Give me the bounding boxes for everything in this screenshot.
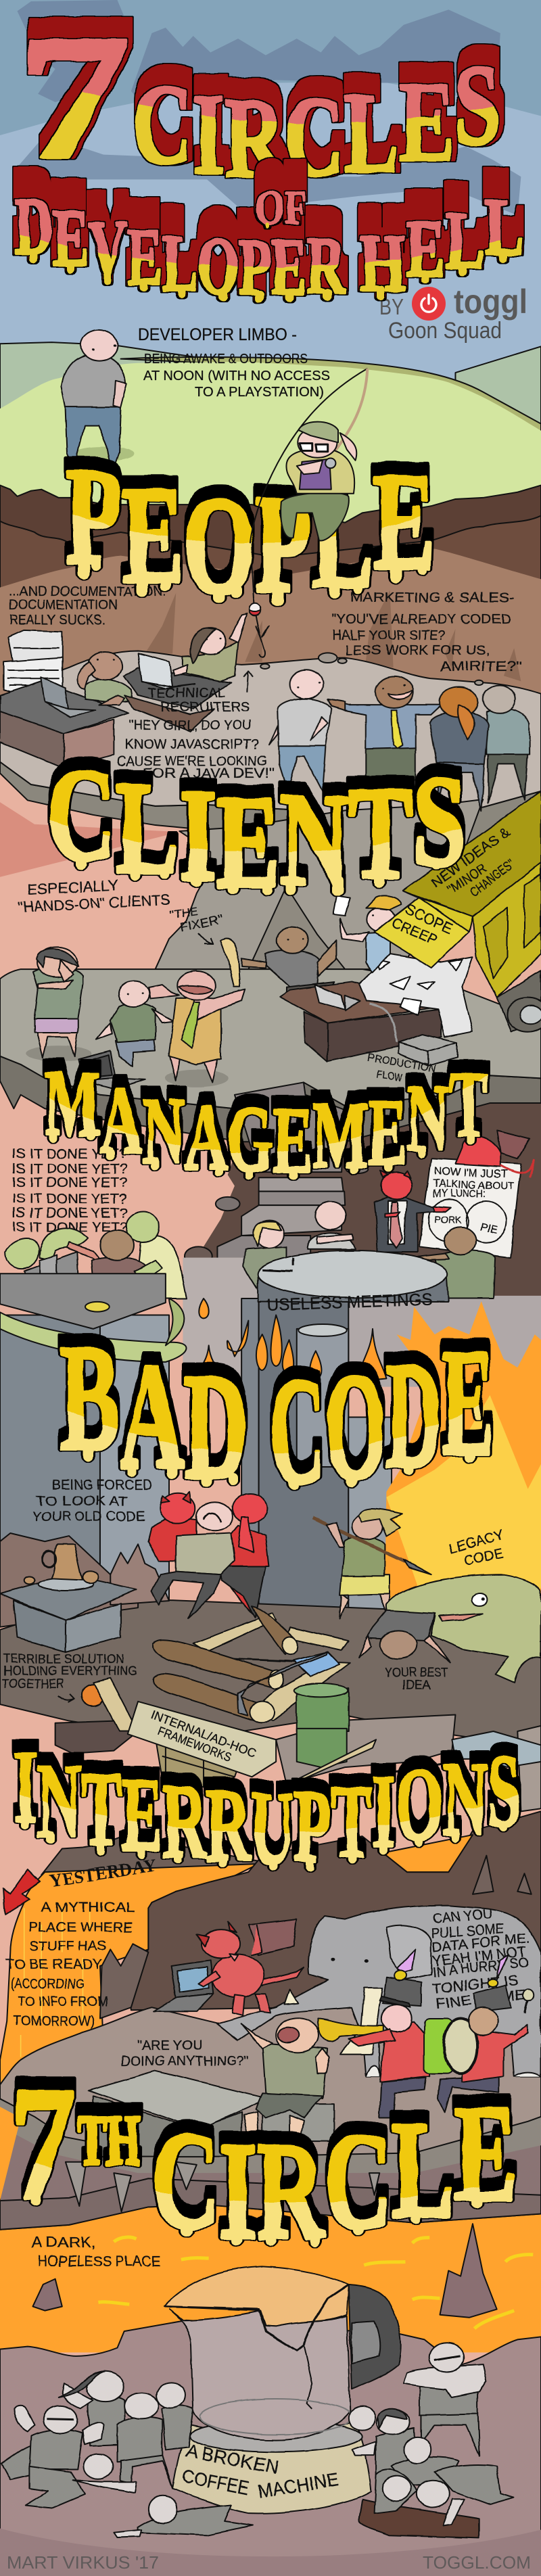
text block: now I'm just talking about my lunch: PORK xyxy=(434,1215,461,1226)
panel: internal framework crate xyxy=(128,1702,541,1789)
title: 7th Circle: 7 xyxy=(10,2053,76,2233)
figure: brown man resting on table xyxy=(410,1227,495,1298)
text block: the fixer: "THE xyxy=(169,906,198,921)
figure: woman covering face xyxy=(26,947,91,1061)
title: 7th Circle xyxy=(10,2053,517,2268)
fishing float and hook xyxy=(249,543,269,657)
text block: now I'm just talking about my lunch: MY LUNCH: xyxy=(433,1188,486,1200)
text block: yesterday: (ACCORDING xyxy=(10,1977,85,1992)
text block: elephant request: FINE BY ME xyxy=(435,1987,526,2012)
panel: interruptions scene xyxy=(3,1854,541,2157)
text block: is it done yet: IS IT DONE YET? xyxy=(12,1206,127,1221)
panel: soil layers and office floor xyxy=(0,486,541,852)
text block: developer limbo: TO A PLAYSTATION) xyxy=(195,385,324,400)
text block: developer limbo: AT NOON (WITH NO ACCESS xyxy=(143,369,330,383)
text block: marketing and sales: LESS WORK FOR US, xyxy=(345,643,490,658)
icon: basketball xyxy=(82,1684,104,1706)
panel: interruptions cavern background and lava xyxy=(0,1715,541,2352)
panel: sky and limbo hills xyxy=(0,0,541,552)
text block: elephant request xyxy=(431,1906,531,2012)
truck captions xyxy=(367,824,518,1084)
text block: is it done yet: IS IT DONE YET? xyxy=(12,1220,127,1235)
title: of: OF xyxy=(256,181,307,235)
text block: marketing and sales xyxy=(331,590,522,674)
text block: terrible solution xyxy=(2,1652,138,1691)
figure: marketer three with orange hair xyxy=(429,687,488,811)
meeting table xyxy=(258,1250,448,1302)
icon: toggl logo with byline: Goon Squad xyxy=(388,318,502,344)
text block: a dark hopeless place: A DARK, xyxy=(31,2234,95,2251)
text block: now I'm just talking about my lunch: PIE xyxy=(479,1221,498,1236)
figure: elephant in the room xyxy=(217,1905,541,2076)
text block: hands-on clients: ESPECIALLY xyxy=(27,876,119,898)
text block: old code: YOUR OLD CODE xyxy=(32,1509,145,1524)
title: 7th Circle: CIRCLE xyxy=(151,2077,517,2268)
truck captions: FLOW xyxy=(375,1069,403,1084)
figure: marketer one xyxy=(269,670,331,792)
title: Developer Hell xyxy=(15,181,524,312)
title: People: PEOPLE xyxy=(66,440,435,622)
text block: terrible solution: HOLDING EVERYTHING xyxy=(3,1664,138,1679)
text block: a dark hopeless place: HOPELESS PLACE xyxy=(38,2253,160,2270)
figure: zombie lying in front xyxy=(114,2496,252,2537)
title: Interruptions: INTERRUPTIONS xyxy=(14,1728,521,1886)
text block: elephant request: TONIGHT IS xyxy=(431,1973,519,1997)
panel: lizard desk and duck xyxy=(0,1273,187,1362)
figure: broken laptop xyxy=(78,1050,145,1090)
text block: old code: BEING FORCED xyxy=(52,1478,152,1493)
text block: a broken coffee machine: MACHINE xyxy=(256,2468,339,2502)
icon: toggl logo with byline xyxy=(379,283,527,344)
text block: is it done yet: IS IT DONE YET? xyxy=(12,1175,127,1190)
coffee puddle xyxy=(359,2500,479,2538)
table xyxy=(88,2071,267,2157)
panel: limbo captions and logo xyxy=(138,283,527,400)
text: internal ad-hoc frameworks sign: FRAMEWORKS xyxy=(156,1724,233,1764)
text block: marketing and sales: MARKETING & SALES- xyxy=(350,590,514,605)
text block: marketing and sales: HALF YOUR SITE? xyxy=(333,628,445,643)
text block: elephant request: DATA FOR ME. xyxy=(431,1930,531,1956)
text block: now I'm just talking about my lunch: NOW I'M JUST xyxy=(434,1166,508,1180)
text block: marketing and sales: "YOU'VE ALREADY CODED xyxy=(331,612,511,627)
figure: trumpet player xyxy=(317,1949,429,2117)
figure: overconfident client at desk xyxy=(241,927,336,996)
figure: right crowd of zombies xyxy=(349,2343,514,2526)
text block: elephant request: IN A HURRY SO xyxy=(431,1954,530,1980)
technical recruiters caption xyxy=(117,686,275,781)
text block: elephant request: CAN YOU xyxy=(431,1906,493,1927)
figure: lizard managers harassing developer xyxy=(0,1211,187,1298)
text block: your best idea: YOUR BEST xyxy=(385,1666,448,1680)
text block: yesterday: PLACE WHERE xyxy=(29,1920,133,1935)
text: credits xyxy=(7,2552,531,2573)
truck captions: CREEP xyxy=(389,914,440,949)
figure: interrupted developer xyxy=(241,2018,335,2141)
text block: a broken coffee machine: A BROKEN xyxy=(184,2439,281,2479)
text block: a broken coffee machine xyxy=(181,2439,339,2502)
text block: your best idea xyxy=(385,1666,448,1693)
text: credits: TOGGL.COM xyxy=(423,2552,531,2573)
text: internal ad-hoc frameworks sign: INTERNAL/AD-HOC xyxy=(149,1708,258,1760)
figure: developer in limbo xyxy=(62,329,134,472)
text block: yesterday: TO INFO FROM xyxy=(18,1994,108,2009)
panel: bad code cavern background xyxy=(0,1258,541,1748)
text block: documentation: DOCUMENTATION xyxy=(9,598,118,613)
text block: hands-on clients xyxy=(18,876,170,916)
title: 7th Circle: TH xyxy=(78,2101,140,2180)
desk and production server xyxy=(279,981,457,1066)
text block: is it done yet: IS IT DONE YET? xyxy=(12,1162,127,1177)
text block: yesterday: STUFF HAS xyxy=(29,1939,107,1954)
truck captions: PRODUCTION xyxy=(367,1052,437,1075)
text: useless meetings: USELESS MEETINGS xyxy=(266,1290,433,1315)
panel: seventh circle lava and ground xyxy=(0,2224,541,2576)
paper stacks xyxy=(3,630,62,699)
panel: management scene xyxy=(0,1131,535,1302)
figure: devils restraining developer xyxy=(148,1492,269,1619)
technical recruiters caption: "HEY GIRL, DO YOU xyxy=(129,718,252,733)
technical recruiters caption: FOR A JAVA DEV!" xyxy=(143,766,275,781)
title: Bad Code: CODE xyxy=(269,1317,494,1515)
panel: bad code scene xyxy=(0,1478,541,1731)
text block: hands-on clients: "HANDS-ON" CLIENTS xyxy=(18,891,170,916)
figure: drummer xyxy=(425,1955,534,2112)
figure: left crowd of zombies xyxy=(1,2371,193,2508)
technical recruiters caption: CAUSE WE'RE LOOKING xyxy=(117,754,267,769)
truck captions: NEW IDEAS & xyxy=(428,824,513,891)
text block: are you doing anything: "ARE YOU xyxy=(137,2038,202,2053)
pedestal with pot xyxy=(0,1544,137,1652)
text block: elephant request: PULL SOME xyxy=(431,1921,504,1942)
figure: marketer four xyxy=(484,686,530,803)
paper pile xyxy=(359,954,473,1037)
panel: clients cavern background xyxy=(0,799,541,1307)
text block: yesterday: TO BE READY xyxy=(5,1957,102,1972)
arrow: yesterday xyxy=(3,1869,40,1915)
text block: the fixer xyxy=(169,906,225,935)
text block: terrible solution: TOGETHER xyxy=(2,1677,64,1691)
text block: developer limbo: DEVELOPER LIMBO - xyxy=(138,325,297,344)
panel: clients scene xyxy=(18,791,541,1090)
coffee machine xyxy=(164,2266,401,2513)
text block: terrible solution: TERRIBLE SOLUTION xyxy=(3,1652,124,1666)
technical recruiters caption: RECRUITERS xyxy=(160,700,250,715)
figure: devil boss in suit xyxy=(375,1171,450,1252)
text block: a dark hopeless place xyxy=(31,2234,160,2270)
text: credits: MART VIRKUS '17 xyxy=(7,2552,159,2573)
icon: toggl logo with byline: BY xyxy=(379,294,404,319)
figure: red devil with laptop xyxy=(154,1919,304,2015)
wood pile and tools xyxy=(93,1606,350,1731)
panel: seventh circle scene xyxy=(1,2234,514,2538)
text block: is it done yet xyxy=(12,1147,127,1235)
title: Developer Hell: HELL xyxy=(360,182,524,308)
figure: fisherman above people title xyxy=(250,369,367,543)
text block: marketing and sales: AMIRITE?" xyxy=(440,659,522,674)
text block: is it done yet: IS IT DONE YET? xyxy=(12,1192,127,1207)
text block: your best idea: IDEA xyxy=(402,1679,431,1693)
text block: developer limbo xyxy=(138,325,330,400)
text block: legacy code: CODE xyxy=(463,1546,504,1569)
text block: now I'm just talking about my lunch: TALKING ABOUT xyxy=(433,1178,515,1192)
truck captions: "MINOR xyxy=(444,861,490,897)
icon: toggl logo with byline: toggl xyxy=(454,283,527,321)
text block: old code xyxy=(32,1478,152,1524)
panel: people scene xyxy=(0,543,530,811)
text block: yesterday xyxy=(5,1854,158,2029)
text block: yesterday: A MYTHICAL xyxy=(41,1900,135,1915)
figure: caveman fixer with club xyxy=(148,939,245,1087)
text block: a broken coffee machine: COFFEE xyxy=(181,2465,251,2499)
figure: legacy code monster xyxy=(359,1574,541,1682)
figure: bored coworker xyxy=(307,1202,356,1249)
text block: old code: TO LOOK AT xyxy=(37,1494,128,1509)
title: 7 Circles: 7 xyxy=(17,0,132,197)
title: 7 Circles: CIRCLES xyxy=(133,41,500,202)
figure: kneeling man xyxy=(97,981,174,1066)
truck with scope creep sign xyxy=(375,791,541,1032)
text block: yesterday: YESTERDAY xyxy=(47,1854,158,1892)
text block: documentation: ...AND DOCUMENTATION. xyxy=(9,584,166,599)
text block: now I'm just talking about my lunch xyxy=(433,1166,515,1236)
arrow: to duct-tape ball xyxy=(59,1695,75,1703)
truck captions: SCOPE xyxy=(402,900,456,937)
second desk with recruiter xyxy=(124,613,247,731)
arrow: to fixer xyxy=(198,933,213,944)
title: Clients: CLIENTS xyxy=(47,742,466,915)
figure: blonde woman xyxy=(243,1221,286,1288)
title: Bad Code: BAD xyxy=(60,1313,248,1511)
title: 7 Circles xyxy=(17,0,500,202)
technical recruiters caption: KNOW JAVASCRIPT? xyxy=(124,737,259,752)
title: Bad Code xyxy=(60,1313,494,1515)
text block: are you doing anything: DOING ANYTHING?" xyxy=(121,2054,249,2069)
text block: elephant request: YEAH I'M NOT xyxy=(431,1944,527,1969)
title: Developer Hell: DEVELOPER xyxy=(15,181,346,312)
text block: documentation: REALLY SUCKS. xyxy=(9,613,105,628)
figure: marketer two with tie xyxy=(328,676,442,780)
left desk with developer xyxy=(0,653,133,768)
text block: documentation xyxy=(9,584,166,628)
technical recruiters caption: TECHNICAL xyxy=(148,686,226,701)
figure: construction worker with paper xyxy=(333,895,402,972)
text block: legacy code: LEGACY xyxy=(447,1527,506,1558)
text block: is it done yet: IS IT DONE YET? xyxy=(12,1147,127,1162)
text block: the fixer: FIXER" xyxy=(179,912,225,935)
arrow: to recruiter xyxy=(243,672,252,693)
figure: spear woman xyxy=(312,1509,431,1619)
text block: are you doing anything xyxy=(121,2038,249,2069)
truck captions: CHANGES" xyxy=(468,856,518,900)
text block: developer limbo: BEING AWAKE & OUTDOORS xyxy=(144,352,308,367)
title: Management: MANAGEMENT xyxy=(45,1051,488,1193)
board with venn diagram xyxy=(419,1131,535,1258)
text block: yesterday: TOMORROW) xyxy=(14,2014,95,2029)
